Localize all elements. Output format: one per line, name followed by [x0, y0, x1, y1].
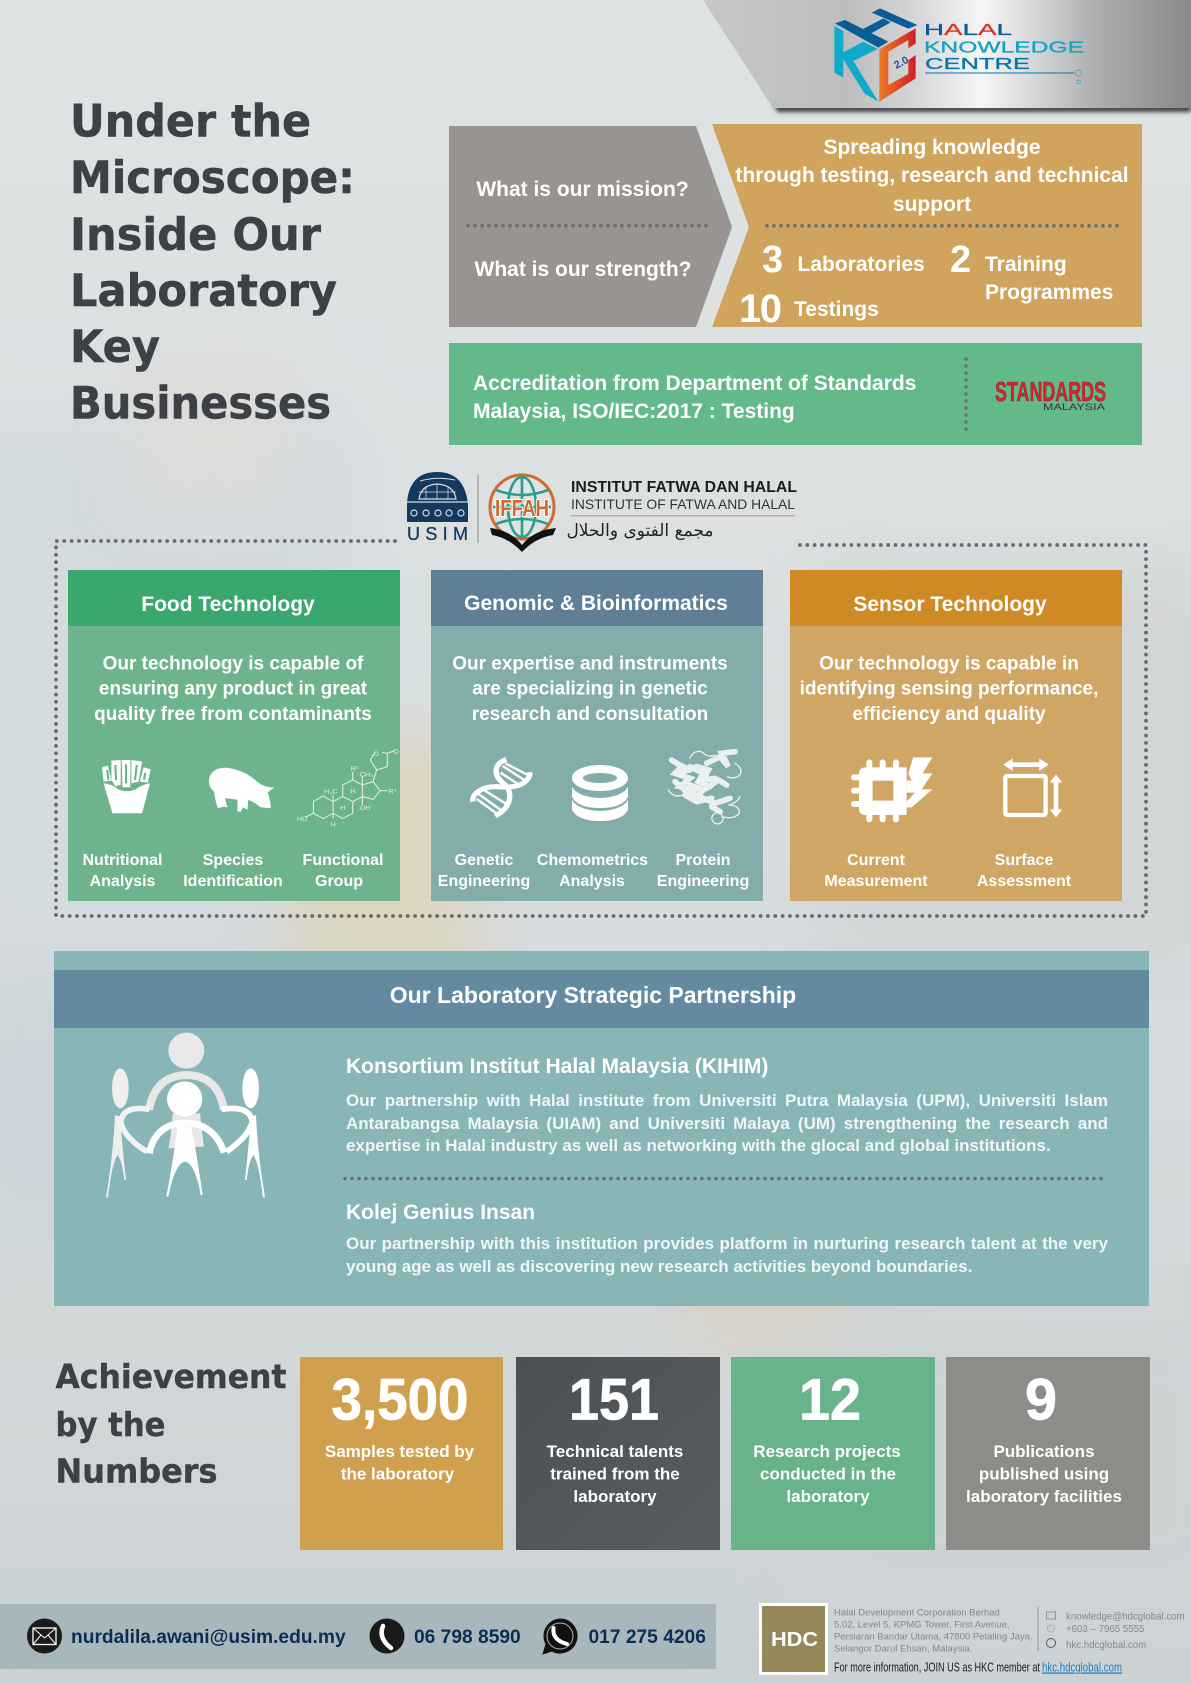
- panel: Sensor Technology: Sensor Technology: [853, 593, 1047, 616]
- icon: protein ribbon: [668, 751, 741, 824]
- header metallic banner: [703, 0, 1191, 112]
- icon: people holding hands: [106, 1033, 265, 1197]
- stat card: 151 talents: 151: [569, 1367, 659, 1432]
- icon: steroid molecule: R³: [388, 788, 397, 795]
- panel: Sensor Technology: [790, 570, 1122, 901]
- heading: Achievement by the Numbers: by the: [56, 1405, 166, 1444]
- panel: Our Laboratory Strategic Partnership: [54, 951, 1149, 1306]
- stat card: 3,500 samples: Samples tested by: [325, 1442, 475, 1461]
- contact bar: 06 798 8590: [414, 1627, 521, 1648]
- logo: Standards Malaysia: MALAYSIA: [1043, 402, 1105, 412]
- panel: mission and strength answers: through testing, research and technical: [735, 164, 1129, 187]
- join information line: hkc.hdcglobal.com: [1042, 1660, 1122, 1674]
- panel: Genomic and Bioinformatics: [431, 570, 763, 901]
- panel: Genomic and Bioinformatics: Genomic & Bioinformatics: [464, 592, 728, 615]
- stat card: 151 talents: laboratory: [573, 1487, 657, 1506]
- panel: mission and strength answers: Laboratories: [798, 253, 925, 276]
- panel: Food Technology: Analysis: [90, 873, 156, 890]
- panel: Our Laboratory Strategic Partnership: young age as well as discovering new research activities beyond boundaries.: [346, 1256, 972, 1276]
- stat card: 9 publications: 9: [1025, 1367, 1057, 1432]
- stat card: 151 talents: Technical talents: [547, 1442, 683, 1461]
- HDC company address: [834, 1608, 1033, 1654]
- stat card: 9 publications: Publications: [993, 1442, 1095, 1461]
- HDC contact details: knowledge@hdcglobal.com: [1066, 1612, 1185, 1622]
- panel: mission and strength questions: [449, 126, 732, 327]
- icon: fries: [102, 760, 151, 813]
- title: Laboratory: [70, 266, 337, 317]
- stat card: 12 projects: 12: [799, 1367, 861, 1432]
- panel: mission and strength answers: 10: [739, 287, 781, 331]
- contact bar: 017 275 4206: [588, 1627, 706, 1648]
- panel: mission and strength answers: 3: [762, 239, 783, 281]
- panel: mission and strength answers: support: [893, 193, 971, 216]
- icon: steroid molecule: OH: [360, 805, 371, 812]
- panel: Food Technology: Food Technology: [141, 593, 315, 616]
- panel: Genomic and Bioinformatics: Engineering: [657, 873, 749, 890]
- panel: mission and strength answers: Training: [985, 253, 1067, 276]
- stat card: 9 publications: [946, 1357, 1150, 1550]
- HDC contact details: hkc.hdcglobal.com: [1066, 1640, 1146, 1651]
- panel: Genomic and Bioinformatics: are specializing in genetic: [472, 678, 708, 700]
- HDC company address: Selangor Darul Ehsan, Malaysia.: [834, 1644, 972, 1654]
- icon: steroid molecule: O: [373, 751, 380, 758]
- panel: mission and strength questions: What is our mission?: [476, 178, 689, 201]
- panel: mission and strength answers: [712, 124, 1142, 331]
- title: [70, 97, 355, 429]
- panel: Our Laboratory Strategic Partnership: Antarabangsa Malaysia (UIAM) and Universiti Malaya (UM) strengthening the research and: [346, 1114, 1108, 1132]
- logo: Halal Knowledge Centre: [834, 8, 1084, 102]
- title: Microscope:: [70, 153, 355, 204]
- institute name: [566, 479, 797, 541]
- stat card: 151 talents: [516, 1357, 720, 1550]
- heading: Achievement by the Numbers: Numbers: [56, 1452, 218, 1490]
- stat card: 9 publications: published using: [979, 1464, 1109, 1484]
- icon: surface dimensions: [1003, 758, 1062, 817]
- panel: Sensor Technology: Measurement: [824, 873, 928, 890]
- icon: DNA: [473, 759, 530, 816]
- panel: Sensor Technology: Current: [847, 852, 906, 869]
- institute name: INSTITUT FATWA DAN HALAL: [571, 479, 797, 496]
- title: Under the: [70, 97, 311, 148]
- panel: Food Technology: Functional: [303, 852, 383, 869]
- panel: mission and strength questions: What is our strength?: [474, 258, 692, 281]
- title: Key: [70, 322, 160, 373]
- panel: Our Laboratory Strategic Partnership: Our partnership with Halal institute from Universiti Putra Malaysia (UPM), Universiti Islam: [346, 1091, 1108, 1110]
- dotted frame around the technology cards: [56, 541, 1146, 916]
- logo: USIM: [407, 472, 468, 544]
- stat card: 12 projects: conducted in the: [760, 1464, 896, 1484]
- HDC company address: Persiaran Bandar Utama, 47800 Petaling Jaya,: [834, 1632, 1033, 1642]
- stat card: 12 projects: laboratory: [786, 1487, 870, 1506]
- stat card: 12 projects: Research projects: [753, 1442, 901, 1461]
- panel: Food Technology: Species: [203, 852, 263, 869]
- icon: database: [572, 765, 628, 821]
- panel: Genomic and Bioinformatics: Chemometrics: [537, 852, 648, 869]
- panel: mission and strength answers: Testings: [794, 298, 879, 321]
- panel: Our Laboratory Strategic Partnership: Our Laboratory Strategic Partnership: [390, 982, 796, 1008]
- logo: Halal Knowledge Centre: KNOWLEDGE: [924, 40, 1084, 56]
- stat card: 12 projects: [731, 1357, 935, 1550]
- icon: steroid molecule: [297, 748, 400, 828]
- panel: Our Laboratory Strategic Partnership: Our partnership with this institution provides platform in nurturing research talent at the very: [346, 1234, 1108, 1253]
- logo: Halal Knowledge Centre: H A L A L: [924, 22, 1012, 39]
- panel: mission and strength answers: 2: [950, 239, 971, 281]
- icon: steroid molecule: H: [331, 822, 336, 828]
- panel: Food Technology: Nutritional: [82, 852, 162, 869]
- panel: Sensor Technology: identifying sensing performance,: [800, 678, 1098, 700]
- panel: mission and strength answers: Programmes: [985, 281, 1113, 304]
- panel: Food Technology: Identification: [183, 873, 283, 890]
- icon: steroid molecule: HO: [297, 816, 308, 823]
- icon: steroid molecule: H: [340, 805, 345, 812]
- panel: Sensor Technology: Assessment: [977, 873, 1072, 890]
- heading: Achievement by the Numbers: [56, 1357, 287, 1490]
- panel: Sensor Technology: Our technology is capable in: [819, 654, 1079, 674]
- panel: Genomic and Bioinformatics: Engineering: [438, 873, 530, 890]
- HDC contact details: +603 – 7965 5555: [1066, 1624, 1144, 1635]
- panel: Our Laboratory Strategic Partnership: Konsortium Institut Halal Malaysia (KIHIM): [346, 1055, 768, 1078]
- title: Inside Our: [70, 210, 321, 261]
- stat card: 3,500 samples: 3,500: [332, 1367, 468, 1432]
- panel: Sensor Technology: efficiency and quality: [852, 704, 1046, 725]
- heading: Achievement by the Numbers: Achievement: [56, 1357, 287, 1396]
- panel: accreditation: [449, 343, 1142, 445]
- logo: IFFAH: IFFAH: [495, 495, 549, 521]
- join information line: For more information, JOIN US as HKC member at: [834, 1660, 1040, 1674]
- stat card: 151 talents: trained from the: [550, 1464, 680, 1484]
- icon: steroid molecule: R¹: [351, 766, 359, 773]
- panel: accreditation: Malaysia, ISO/IEC:2017 : Testing: [473, 400, 795, 423]
- panel: Food Technology: [68, 570, 400, 901]
- icon: steroid molecule: H: [350, 788, 355, 795]
- institute name: مجمع الفتوى والحلال: [566, 521, 714, 541]
- logo: HDC: HDC: [771, 1629, 818, 1651]
- panel: Genomic and Bioinformatics: Analysis: [559, 873, 625, 890]
- icon: mail: [27, 1618, 62, 1654]
- icon: pig: [209, 768, 274, 812]
- contact bar: nurdalila.awani@usim.edu.my: [71, 1627, 346, 1648]
- panel: Food Technology: Group: [315, 873, 363, 890]
- panel: Our Laboratory Strategic Partnership: expertise in Halal industry as well as networking with the glocal and global institutions.: [346, 1136, 1051, 1155]
- panel: Sensor Technology: Surface: [995, 852, 1053, 869]
- icon: WhatsApp: [543, 1619, 577, 1654]
- panel: Genomic and Bioinformatics: Our expertise and instruments: [452, 654, 728, 674]
- logo: HDC: [759, 1603, 828, 1675]
- panel: mission and strength answers: Spreading knowledge: [823, 136, 1041, 159]
- HDC company address: 5.02, Level 5, KPMG Tower, First Avenue,: [834, 1620, 1010, 1630]
- panel: Genomic and Bioinformatics: research and consultation: [472, 704, 708, 725]
- panel: Our Laboratory Strategic Partnership: Kolej Genius Insan: [346, 1201, 535, 1224]
- logo: Halal Knowledge Centre: 2.0: [892, 54, 911, 72]
- logo: IFFAH: [490, 475, 556, 552]
- HDC contact details: [1046, 1612, 1185, 1651]
- panel: Genomic and Bioinformatics: Genetic: [455, 852, 513, 869]
- icon: phone: [370, 1618, 404, 1654]
- title: Businesses: [70, 378, 331, 430]
- logo: USIM: USIM: [407, 524, 468, 544]
- panel: Genomic and Bioinformatics: Protein: [675, 852, 731, 869]
- logo: Halal Knowledge Centre: CENTRE: [925, 56, 1030, 73]
- panel: accreditation: Accreditation from Department of Standards: [473, 372, 916, 395]
- stat card: 9 publications: laboratory facilities: [966, 1487, 1122, 1506]
- icon: steroid molecule: CH₃: [360, 772, 373, 779]
- logo: Standards Malaysia: [995, 376, 1106, 412]
- stat card: 3,500 samples: the laboratory: [341, 1464, 455, 1484]
- icon: steroid molecule: H₃C: [324, 788, 337, 795]
- logo: Standards Malaysia: STANDARDS: [995, 376, 1106, 407]
- icon: steroid molecule: O: [393, 748, 400, 755]
- icon: chip with lightning: [851, 757, 932, 822]
- panel: Food Technology: quality free from contaminants: [94, 704, 372, 725]
- institute name: INSTITUTE OF FATWA AND HALAL: [571, 496, 795, 512]
- panel: Food Technology: Our technology is capable of: [103, 654, 364, 674]
- stat card: 3,500 samples: [300, 1357, 503, 1550]
- contact bar: [0, 1604, 716, 1669]
- panel: Food Technology: ensuring any product in great: [99, 678, 368, 700]
- HDC company address: Halal Development Corporation Berhad: [834, 1608, 1000, 1618]
